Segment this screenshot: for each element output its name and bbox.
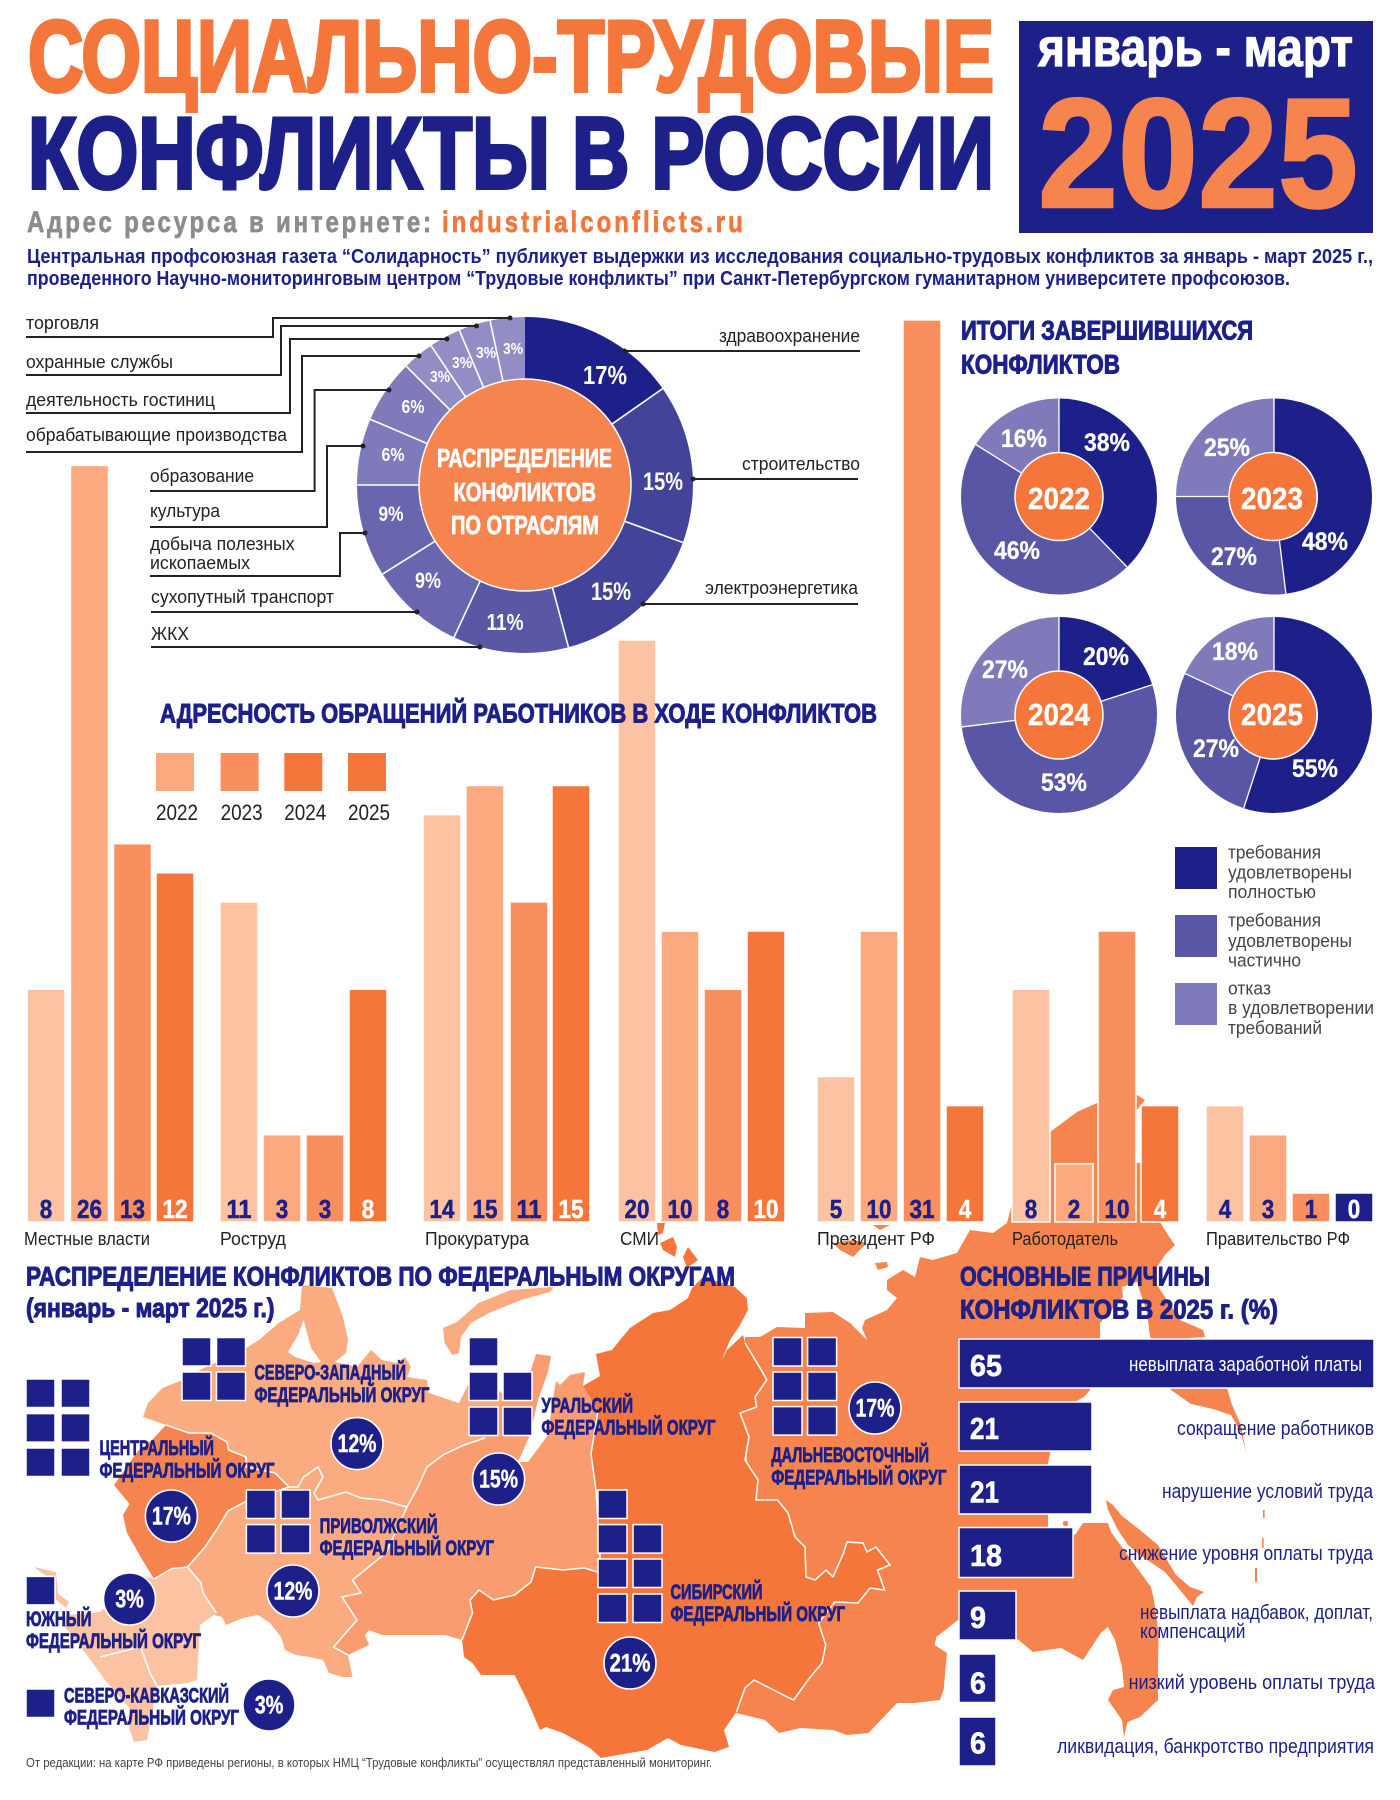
heading: federal districts: РАСПРЕДЕЛЕНИЕ КОНФЛИКТОВ ПО ФЕДЕРАЛЬНЫМ ОКРУГАМ <box>26 1262 735 1292</box>
cause 21 <box>959 1465 1374 1514</box>
label: добыча полезных ископаемых: добыча полезных <box>150 534 294 554</box>
donut center title: КОНФЛИКТОВ <box>454 477 596 507</box>
donut 2023: 27% <box>1211 543 1257 571</box>
legend item: partly satisfied: удовлетворены <box>1228 931 1352 951</box>
region: Ural district <box>334 1354 601 1655</box>
district: Центральный <box>26 1379 275 1542</box>
donut 2024: 2024 <box>1028 697 1091 732</box>
bar group: Прокуратура <box>423 786 590 1249</box>
donut 2024: 53% <box>1041 769 1087 797</box>
title line 1: СОЦИАЛЬНО-ТРУДОВЫЕ <box>28 1 994 113</box>
bar group: Прокуратура: 15 <box>558 1194 584 1224</box>
district: Приволжский <box>246 1490 494 1617</box>
year: 2025 <box>1038 67 1358 241</box>
donut 2023: 25% <box>1204 434 1250 462</box>
donut percentages <box>378 341 683 635</box>
bar group: Местные власти: 26 <box>77 1194 102 1224</box>
bar group: Президент РФ: 10 <box>866 1194 892 1224</box>
heading: results of finished conflicts <box>961 316 1253 380</box>
donut percentages: 11% <box>486 609 524 635</box>
donut 2022: 2022 <box>1028 481 1090 516</box>
district: Сибирский <box>598 1490 845 1689</box>
chart: main causes of conflicts <box>959 1339 1376 1766</box>
bar group: СМИ: 10 <box>754 1194 778 1224</box>
heading: main causes <box>960 1262 1278 1324</box>
label: охранные службы: охранные службы <box>26 352 173 372</box>
donut percentages: 17% <box>583 360 627 390</box>
district: Южный: 3% <box>115 1586 144 1614</box>
heading: main causes: ОСНОВНЫЕ ПРИЧИНЫ <box>960 1262 1210 1292</box>
bar group: Роструд: Роструд <box>220 1229 286 1249</box>
district: Сибирский: СИБИРСКИЙ <box>670 1580 762 1604</box>
district: Приволжский: ПРИВОЛЖСКИЙ <box>320 1514 438 1538</box>
legend item: fully satisfied: требования <box>1228 842 1321 862</box>
region: Volga district <box>188 1467 407 1677</box>
label: строительство: строительство <box>742 454 860 474</box>
bar group: Правительство РФ: 1 <box>1305 1194 1317 1224</box>
donut percentages: 9% <box>378 503 404 526</box>
donut 2024: 27% <box>982 656 1028 684</box>
district: Дальневосточный: ДАЛЬНЕВОСТОЧНЫЙ <box>771 1443 929 1467</box>
cause 9: 9 <box>970 1600 986 1635</box>
donut leader lines and industry labels <box>26 313 860 650</box>
district: Приволжский: ФЕДЕРАЛЬНЫЙ ОКРУГ <box>320 1536 494 1560</box>
region: Sakhalin and Arctic islands <box>833 1225 1265 1606</box>
region: Central district <box>114 1425 289 1579</box>
bar chart legend <box>156 753 390 825</box>
donut 2025: 18% <box>1212 638 1258 666</box>
bar chart legend: 2022 <box>156 800 198 825</box>
district: Дальневосточный <box>771 1338 946 1490</box>
district: Центральный: ЦЕНТРАЛЬНЫЙ <box>100 1436 214 1460</box>
donut 2023: 48% <box>1302 528 1348 556</box>
district: Северо-Западный: СЕВЕРО-ЗАПАДНЫЙ <box>254 1360 406 1384</box>
district: Сибирский: 21% <box>610 1650 650 1678</box>
bar group: Работодатель: 4 <box>1154 1194 1167 1224</box>
cause 21: сокращение работников <box>1177 1418 1374 1440</box>
donut center title <box>437 443 612 540</box>
donut 2023 <box>1176 398 1348 594</box>
district: Центральный: 17% <box>152 1502 191 1530</box>
bar group: СМИ: 10 <box>668 1194 692 1224</box>
bar group: Роструд <box>220 902 387 1249</box>
legend item: partly satisfied: частично <box>1228 950 1301 970</box>
bar chart legend: 2024 <box>284 800 326 825</box>
region: Crimea <box>34 1567 69 1608</box>
region: White Sea <box>288 1320 321 1363</box>
bar group: Правительство РФ <box>1206 1106 1373 1249</box>
website address: industrialconflicts.ru <box>442 204 743 239</box>
cause 6: 6 <box>970 1666 986 1701</box>
district: Центральный: ФЕДЕРАЛЬНЫЙ ОКРУГ <box>100 1458 275 1482</box>
bar group: Местные власти: Местные власти <box>24 1229 150 1249</box>
label: охранные службы <box>26 324 479 375</box>
district: Дальневосточный: 17% <box>856 1394 894 1422</box>
bar group: Местные власти: 12 <box>162 1194 188 1224</box>
label: деятельность гостиниц <box>26 336 450 413</box>
label: ЖКХ <box>151 624 482 650</box>
legend item: partly satisfied <box>1175 910 1352 970</box>
cause 21: нарушение условий труда <box>1162 1481 1374 1503</box>
donut 2022: 46% <box>994 537 1040 565</box>
district: Южный <box>26 1573 201 1653</box>
bar group: Прокуратура: 11 <box>516 1194 542 1224</box>
label: сухопутный транспорт: сухопутный транспорт <box>151 587 334 607</box>
donut 2023: 2023 <box>1241 481 1303 516</box>
district: Северо-Западный: ФЕДЕРАЛЬНЫЙ ОКРУГ <box>254 1383 430 1407</box>
donut percentages: 3% <box>503 341 523 358</box>
donut percentages: 15% <box>643 468 683 496</box>
label: деятельность гостиниц: деятельность гостиниц <box>26 390 215 410</box>
bar group: СМИ: 8 <box>717 1194 729 1224</box>
legend item: refused: отказ <box>1228 978 1271 998</box>
bar group: Прокуратура: 15 <box>472 1194 498 1224</box>
region: Northwestern district <box>143 1285 505 1507</box>
label: торговля <box>26 313 512 337</box>
bar chart heading: АДРЕСНОСТЬ ОБРАЩЕНИЙ РАБОТНИКОВ В ХОДЕ КОНФЛИКТОВ <box>160 698 877 728</box>
label: культура: культура <box>150 501 221 521</box>
bar group: СМИ: 20 <box>624 1194 650 1224</box>
heading: results of finished conflicts: ИТОГИ ЗАВЕРШИВШИХСЯ <box>961 316 1253 346</box>
cause 6: 6 <box>970 1726 986 1761</box>
label: образование: образование <box>150 466 254 486</box>
donut percentages: 3% <box>430 369 450 386</box>
bar group: Роструд: 3 <box>276 1194 288 1224</box>
bar group: СМИ: СМИ <box>620 1229 659 1249</box>
donut 2025: 2025 <box>1241 697 1303 732</box>
bar group: Прокуратура: Прокуратура <box>425 1229 530 1249</box>
bar group: Работодатель: Работодатель <box>1012 1229 1118 1249</box>
map of Russia by federal districts <box>34 1095 1265 1758</box>
district: Дальневосточный: ФЕДЕРАЛЬНЫЙ ОКРУГ <box>771 1466 946 1490</box>
heading: federal districts <box>26 1262 735 1323</box>
label: образование <box>150 388 392 491</box>
label: здравоохранение: здравоохранение <box>719 326 860 346</box>
district: Северо-Западный: 12% <box>338 1430 376 1458</box>
bar group: Президент РФ: 5 <box>830 1194 842 1224</box>
legend: conflict outcomes <box>1175 842 1374 1038</box>
label: добыча полезных ископаемых <box>150 530 368 576</box>
bar group: Президент РФ <box>817 320 984 1249</box>
footnote: От редакции: на карте РФ приведены регионы, в которых НМЦ “Трудовые конфликты” осуществлял представленный мониторинг. <box>26 1756 712 1770</box>
district: Сибирский: ФЕДЕРАЛЬНЫЙ ОКРУГ <box>670 1602 845 1626</box>
cause 21: 21 <box>970 1474 999 1510</box>
region: Far Eastern district <box>736 1095 1246 1737</box>
bar group: Работодатель <box>1012 931 1179 1249</box>
bar group: Работодатель: 8 <box>1025 1194 1037 1224</box>
bar group: СМИ <box>618 640 785 1249</box>
label: обрабатывающие производства: обрабатывающие производства <box>26 425 288 445</box>
legend item: refused <box>1175 978 1374 1038</box>
region borders <box>100 1343 890 1712</box>
cause 9: компенсаций <box>1140 1621 1246 1643</box>
district: Северо-Кавказский <box>26 1679 295 1731</box>
bar group: Президент РФ: 4 <box>959 1194 972 1224</box>
district: Южный: ЮЖНЫЙ <box>26 1607 92 1631</box>
bar chart legend: 2023 <box>221 800 263 825</box>
donut percentages: 6% <box>382 445 404 465</box>
donut 2025 <box>1185 617 1345 808</box>
legend item: fully satisfied: удовлетворены <box>1228 862 1352 882</box>
district: Северо-Кавказский: ФЕДЕРАЛЬНЫЙ ОКРУГ <box>64 1706 239 1730</box>
label: торговля: торговля <box>26 313 99 333</box>
district: Северо-Кавказский: 3% <box>255 1692 283 1720</box>
bar group: Правительство РФ: 0 <box>1348 1194 1360 1224</box>
heading: federal districts: (январь - март 2025 г.) <box>26 1293 274 1323</box>
district: Южный: ФЕДЕРАЛЬНЫЙ ОКРУГ <box>26 1629 201 1653</box>
legend item: fully satisfied <box>1175 842 1352 902</box>
legend item: refused: требований <box>1228 1018 1322 1038</box>
date panel <box>1019 18 1373 241</box>
donut 2025: 55% <box>1292 755 1338 783</box>
cause 65 <box>959 1339 1374 1388</box>
heading: main causes: КОНФЛИКТОВ В 2025 г. (%) <box>960 1294 1278 1324</box>
bar chart: addressees of appeals <box>24 320 1373 1249</box>
region: Siberian islands <box>657 1223 698 1268</box>
donut percentages: 3% <box>452 355 472 372</box>
label: строительство <box>690 454 860 482</box>
label: ЖКХ: ЖКХ <box>151 624 189 644</box>
legend item: partly satisfied: требования <box>1228 910 1321 930</box>
cause 6 <box>959 1654 1376 1702</box>
donut center title: ПО ОТРАСЛЯМ <box>451 510 599 540</box>
intro paragraph <box>27 246 1373 290</box>
bar group: Работодатель: 10 <box>1104 1194 1130 1224</box>
donut 2024 <box>962 617 1152 797</box>
bar group: Правительство РФ: 4 <box>1219 1194 1232 1224</box>
district: Уральский <box>469 1338 716 1505</box>
bar group: Роструд: 3 <box>319 1194 331 1224</box>
legend item: fully satisfied: полностью <box>1228 882 1316 902</box>
district: Приволжский: 12% <box>274 1578 312 1606</box>
donut 2022: 38% <box>1084 429 1130 457</box>
label: электроэнергетика <box>640 578 859 606</box>
cause 18 <box>959 1528 1374 1578</box>
donut percentages: 9% <box>415 568 441 593</box>
donut percentages: 3% <box>476 345 496 362</box>
donut percentages: 6% <box>402 397 424 417</box>
bar group: Роструд: 11 <box>226 1194 252 1224</box>
bar group: Местные власти: 8 <box>40 1194 52 1224</box>
bar group: Местные власти: 13 <box>120 1194 145 1224</box>
heading: results of finished conflicts: КОНФЛИКТОВ <box>961 350 1120 380</box>
district: Северо-Западный <box>182 1338 430 1470</box>
donut center title: РАСПРЕДЕЛЕНИЕ <box>437 443 612 473</box>
website line: Адрес ресурса в интернете: <box>27 204 431 239</box>
cause 21: 21 <box>970 1411 999 1446</box>
cause 18: 18 <box>970 1538 1002 1573</box>
donut percentages: 15% <box>591 578 631 606</box>
district: Уральский: 15% <box>479 1466 518 1494</box>
cause 6: низкий уровень оплаты труда <box>1129 1672 1376 1694</box>
district: Уральский: ФЕДЕРАЛЬНЫЙ ОКРУГ <box>542 1416 716 1440</box>
donut 2022 <box>976 398 1130 568</box>
region: Southern and North Caucasian districts <box>62 1567 216 1742</box>
donut chart: conflicts by industry <box>357 321 683 647</box>
bar chart legend: 2025 <box>348 800 390 825</box>
cause 65: 65 <box>970 1348 1002 1383</box>
bar group: Правительство РФ: 3 <box>1262 1194 1274 1224</box>
cause 21 <box>959 1402 1374 1451</box>
legend item: refused: в удовлетворении <box>1228 998 1374 1018</box>
cause 65: невыплата заработной платы <box>1129 1354 1362 1376</box>
region: Novaya Zemlya <box>443 1287 554 1355</box>
label: сухопутный транспорт <box>151 587 420 614</box>
region: Siberian district <box>462 1277 890 1758</box>
title line 2: КОНФЛИКТЫ В РОССИИ <box>28 98 994 210</box>
label: добыча полезных ископаемых: ископаемых <box>150 553 250 573</box>
label: культура <box>150 444 366 527</box>
bar group: Местные власти <box>24 465 194 1249</box>
district: Уральский: УРАЛЬСКИЙ <box>542 1394 633 1418</box>
cause 6 <box>959 1717 1374 1766</box>
title <box>28 1 994 210</box>
website line <box>27 204 743 239</box>
donut 2024: 20% <box>1083 643 1129 671</box>
label: здравоохранение <box>622 326 860 354</box>
bar group: Правительство РФ: Правительство РФ <box>1206 1229 1350 1249</box>
label: обрабатывающие производства <box>26 354 422 452</box>
donut 2025: 27% <box>1193 735 1239 763</box>
donut 2022: 16% <box>1001 425 1047 453</box>
cause 9 <box>959 1591 1373 1643</box>
bar group: Роструд: 8 <box>362 1194 374 1224</box>
period: январь - март <box>1037 18 1353 78</box>
bar group: Прокуратура: 14 <box>430 1194 455 1224</box>
bar group: Работодатель: 2 <box>1068 1194 1080 1224</box>
bar group: Президент РФ: 31 <box>910 1194 934 1224</box>
bar group: Президент РФ: Президент РФ <box>817 1229 935 1249</box>
label: электроэнергетика: электроэнергетика <box>705 578 859 598</box>
district: Северо-Кавказский: СЕВЕРО-КАВКАЗСКИЙ <box>64 1684 229 1708</box>
